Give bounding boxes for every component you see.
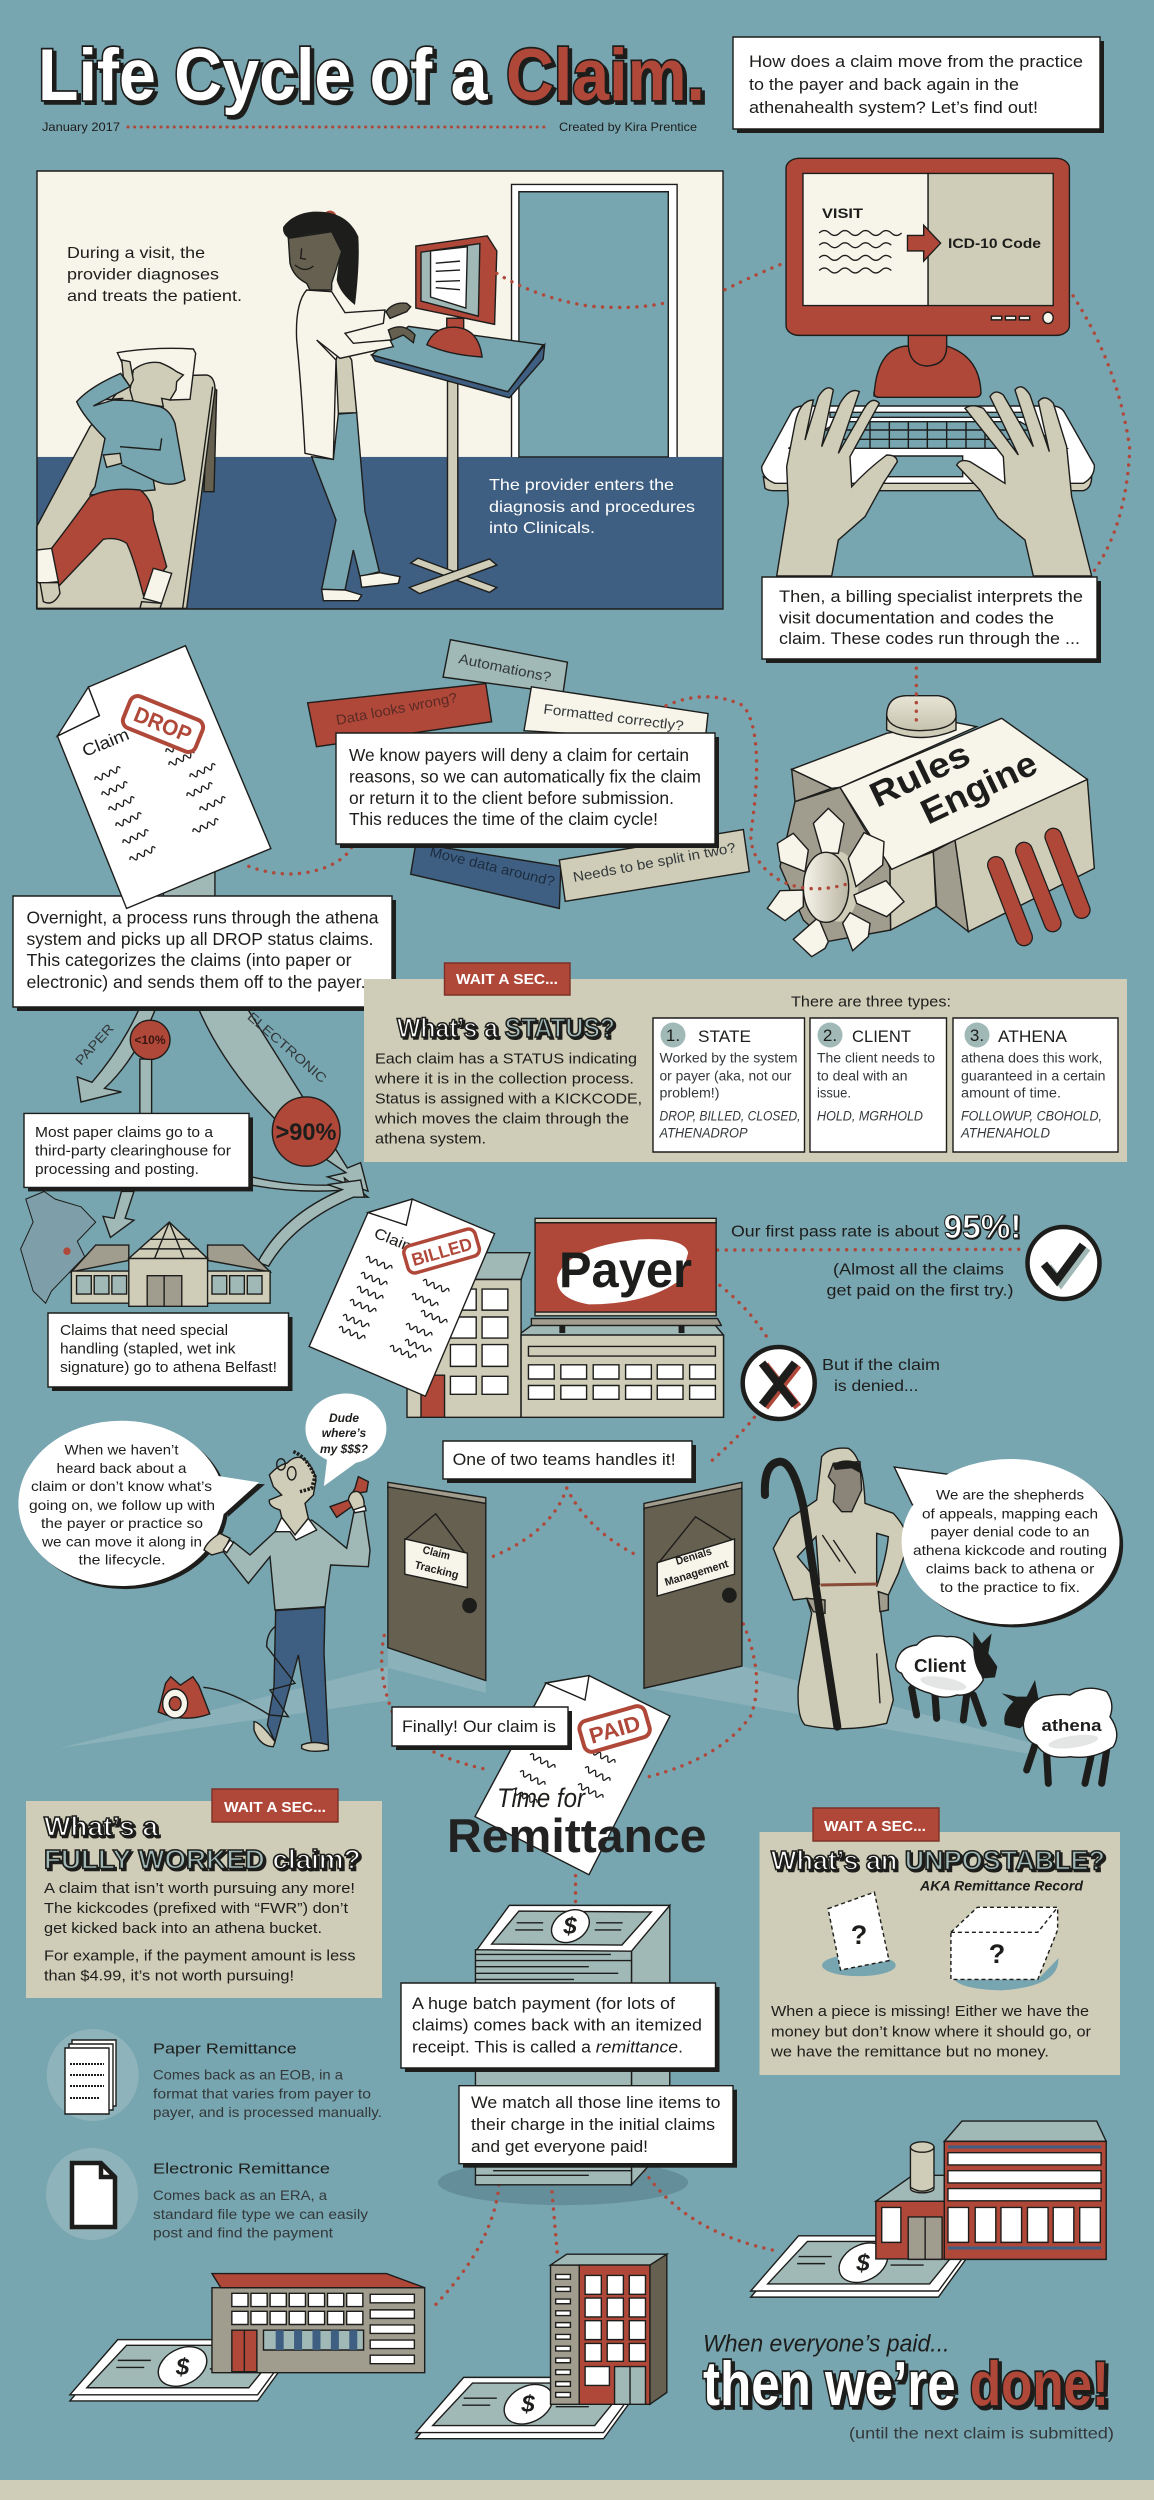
- door: [512, 184, 677, 457]
- panel: fully worked claim: FULLY WORKED claim?: [44, 1844, 361, 1874]
- panel: fully worked claim: get kicked back into an athena bucket.: [44, 1920, 322, 1937]
- icon: check mark: [1028, 1227, 1100, 1299]
- panel: unpostable: AKA Remittance Record: [919, 1879, 1084, 1894]
- batch payment box: A huge batch payment (for lots of: [412, 1995, 675, 2013]
- denied text: is denied...: [834, 1378, 918, 1395]
- status description: Status is assigned with a KICKCODE,: [375, 1090, 642, 1107]
- standing desk with monitor: [372, 236, 545, 594]
- speech bubble: dude where's my money: Dude: [329, 1411, 359, 1425]
- text: during a visit: provider diagnoses: [67, 266, 219, 284]
- speech bubble: follow up: [18, 1421, 265, 1589]
- patient in chair: [37, 348, 217, 608]
- status description: [374, 1050, 642, 1147]
- speech bubble: follow up: we can move it along in: [41, 1534, 202, 1550]
- date and credit line: [42, 120, 697, 134]
- money stack: [475, 1905, 670, 2185]
- batch payment box: [401, 1983, 720, 2072]
- date and credit line: January 2017: [42, 120, 120, 134]
- building with money: left: $: [175, 2354, 190, 2381]
- card: state: or payer (aka, not our: [660, 1068, 792, 1084]
- panel frame: [37, 171, 723, 609]
- electronic remittance item: Electronic Remittance: [153, 2160, 330, 2178]
- panel: unpostable: [760, 1808, 1120, 2075]
- first pass rate callout: get paid on the first try.): [826, 1283, 1014, 1300]
- match line items box: their charge in the initial claims: [471, 2116, 715, 2134]
- panel: fully worked claim: For example, if the payment amount is less: [44, 1948, 356, 1965]
- panel: exam room: [37, 171, 723, 609]
- text: during a visit: During a visit, the: [67, 245, 205, 262]
- illustration: big monitor and keyboard: VISIT: [822, 205, 864, 221]
- automation explanation box: This reduces the time of the claim cycle!: [349, 809, 658, 829]
- illustration: payer building: Payer: [559, 1242, 692, 1298]
- speech bubble: follow up: claim or don’t know what’s: [31, 1478, 212, 1494]
- panel: fully worked claim: A claim that isn’t worth pursuing any more!: [44, 1880, 355, 1897]
- text: provider enters: diagnosis and procedures: [489, 499, 695, 516]
- overnight box: This categorizes the claims (into paper or: [26, 950, 352, 970]
- match line items box: We match all those line items to: [471, 2094, 720, 2112]
- stamp: PAID: [578, 1704, 652, 1754]
- card: state: problem!): [660, 1086, 720, 1101]
- panel: what's a status: What’s a STATUS?: [397, 1013, 615, 1043]
- match line items box: and get everyone paid!: [471, 2138, 648, 2156]
- text: provider enters: [489, 477, 695, 537]
- tag: wait a sec: [813, 1808, 939, 1841]
- speech bubble: follow up: the payer or practice so: [41, 1515, 203, 1531]
- sheep: athena: [1002, 1680, 1117, 1783]
- first pass rate callout: Our first pass rate is about: [731, 1224, 940, 1241]
- illustration: man on phone: [203, 1452, 370, 1751]
- match line items box: [459, 2086, 737, 2168]
- door: claim tracking: [388, 1482, 486, 1681]
- dotted connectors lower: [431, 1876, 776, 2310]
- panel: unpostable: ?: [851, 1920, 867, 1950]
- closing headline: then we’re done!: [703, 2350, 1109, 2419]
- card: client: 2.: [823, 1026, 837, 1045]
- percentage labels: >90%: [276, 1119, 336, 1146]
- building with money: center: $: [520, 2391, 535, 2418]
- tag: wait a sec: [212, 1789, 338, 1822]
- door: denials management: Denials: [674, 1546, 713, 1568]
- building with money: right factory: $: [855, 2250, 870, 2277]
- card: state: Worked by the system: [660, 1051, 798, 1066]
- overnight box: Overnight, a process runs through the athena: [26, 908, 379, 928]
- percentage labels: [72, 1009, 336, 1146]
- title: Life Cycle of a Claim.: [38, 35, 705, 116]
- door: denials management: Management: [663, 1558, 730, 1589]
- document: PAID claim: [475, 1676, 670, 1875]
- athena belfast box: handling (stapled, wet ink: [60, 1340, 236, 1357]
- finally box: Finally! Our claim is: [402, 1718, 556, 1736]
- athena belfast box: [48, 1313, 292, 1391]
- speech bubble: follow up: heard back about a: [56, 1460, 187, 1476]
- card: state: 1.: [666, 1026, 680, 1045]
- footer band: [0, 2480, 1154, 2500]
- dotted connectors: [497, 263, 1130, 577]
- map and athena belfast building: [21, 1191, 270, 1306]
- closing headline: (until the next claim is submitted): [849, 2426, 1114, 2443]
- door: claim tracking: Tracking: [413, 1559, 460, 1582]
- document: BILLED claim: Claim: [372, 1225, 419, 1257]
- card: state: ATHENADROP: [659, 1126, 748, 1141]
- lower question tags: Needs to be split in two?: [572, 839, 737, 885]
- most paper claims box: [24, 1113, 253, 1191]
- card: state: STATE: [698, 1027, 751, 1046]
- most paper claims box: processing and posting.: [35, 1161, 199, 1178]
- card: athena: guaranteed in a certain: [961, 1068, 1106, 1084]
- door: denials management: [644, 1482, 742, 1688]
- automation explanation box: We know payers will deny a claim for certain: [349, 745, 689, 765]
- batch payment box: receipt. This is called a remittance .: [412, 2039, 683, 2057]
- illustration: rules engine: Rules: [864, 734, 976, 815]
- speech bubble: shepherds of appeals: of appeals, mapping each: [922, 1506, 1098, 1522]
- speech bubble: shepherds of appeals: claims back to athena or: [926, 1560, 1095, 1576]
- paper remittance item: format that varies from payer to: [153, 2085, 371, 2101]
- closing headline: [703, 2330, 1114, 2443]
- stamp: BILLED: [402, 1227, 481, 1275]
- left hand: [777, 388, 897, 576]
- door: claim tracking: Claim: [421, 1544, 452, 1563]
- tag: wait a sec: WAIT A SEC...: [224, 1799, 326, 1816]
- billing specialist box: claim. These codes run through the ...: [779, 629, 1080, 648]
- icon: red telephone: [158, 1677, 210, 1718]
- status description: where it is in the collection process.: [374, 1070, 634, 1087]
- floor light wedges: [59, 1648, 1030, 1754]
- percentage labels: ELECTRONIC: [245, 1009, 330, 1086]
- billing specialist box: visit documentation and codes the: [779, 608, 1054, 628]
- icon: denied x: [743, 1347, 815, 1419]
- money stack: $: [562, 1913, 577, 1940]
- denied text: [822, 1357, 940, 1395]
- batch payment box: claims) comes back with an itemized: [412, 2016, 702, 2034]
- denied text: But if the claim: [822, 1357, 940, 1374]
- percentage bubble over 90: [272, 1097, 340, 1166]
- percentage bubble under 10: [130, 1020, 170, 1059]
- heading: time for remittance: [447, 1783, 706, 1862]
- dotted connectors near rules engine: [249, 668, 916, 889]
- arrows to billed and athena belfast: [103, 1176, 368, 1266]
- automation question tags: Automations?: [457, 650, 553, 685]
- building with money: center: [416, 2254, 667, 2439]
- text: provider enters: into Clinicals.: [489, 520, 595, 537]
- heading: time for remittance: Remittance: [447, 1809, 706, 1862]
- intro box: to the payer and back again in the: [749, 75, 1019, 94]
- panel: unpostable: What’s an UNPOSTABLE?: [771, 1846, 1105, 1876]
- electronic remittance item: Comes back as an ERA, a: [153, 2187, 327, 2203]
- speech bubble: dude where's my money: my $$$?: [320, 1442, 369, 1456]
- building with money: left: [70, 2274, 425, 2401]
- illustration: shepherd: [765, 1448, 908, 1729]
- percentage labels: <10%: [134, 1033, 166, 1047]
- text: during a visit: [67, 245, 242, 305]
- first pass rate callout: [731, 1208, 1022, 1300]
- panel: fully worked claim: than $4.99, it’s not worth pursuing!: [44, 1967, 294, 1984]
- athena belfast box: Claims that need special: [60, 1322, 228, 1339]
- one of two teams box: One of two teams handles it!: [453, 1450, 676, 1469]
- automation question tags: Data looks wrong?: [335, 689, 459, 728]
- card: client: issue.: [817, 1086, 851, 1101]
- tag: wait a sec: WAIT A SEC...: [824, 1818, 926, 1835]
- card: client: CLIENT: [852, 1027, 911, 1046]
- status description: Each claim has a STATUS indicating: [375, 1050, 637, 1067]
- automation question tags: [308, 640, 708, 747]
- most paper claims box: third-party clearinghouse for: [35, 1142, 231, 1160]
- document: DROP claim: [57, 646, 271, 908]
- overnight box: electronic) and sends them off to the payer.: [26, 972, 365, 992]
- illustration: rules engine: Engine: [915, 744, 1043, 832]
- speech bubble: dude where's my money: where’s: [322, 1426, 367, 1440]
- speech bubble: shepherds of appeals: athena kickcode and routing: [913, 1542, 1107, 1558]
- illustration: rules engine: [767, 696, 1094, 957]
- intro box: How does a claim move from the practice: [749, 52, 1083, 71]
- speech bubble: shepherds of appeals: We are the shepherds: [936, 1487, 1084, 1503]
- tag: wait a sec: [444, 963, 570, 995]
- stamp: PAID: PAID: [586, 1710, 643, 1749]
- speech bubble: dude where's my money: [305, 1394, 386, 1486]
- one of two teams box: [443, 1441, 696, 1483]
- tag: wait a sec: WAIT A SEC...: [456, 971, 558, 988]
- speech bubble: shepherds of appeals: payer denial code to an: [930, 1524, 1090, 1540]
- closing headline: When everyone’s paid...: [703, 2330, 950, 2357]
- card: client: [810, 1018, 946, 1152]
- intro box: [733, 37, 1104, 133]
- automation question tags: Formatted correctly?: [543, 701, 685, 734]
- automation explanation box: [336, 733, 719, 848]
- text: during a visit: and treats the patient.: [67, 288, 242, 305]
- card: athena: ATHENA: [998, 1027, 1068, 1046]
- right hand: [957, 387, 1092, 576]
- lower question tags: [411, 830, 749, 908]
- speech bubble: follow up: going on, we follow up with: [29, 1497, 215, 1513]
- panel: unpostable: ?: [989, 1939, 1005, 1969]
- automation explanation box: or return it to the client before submission.: [349, 788, 674, 808]
- stamp: DROP: DROP: [130, 702, 195, 747]
- card: state: DROP, BILLED, CLOSED,: [660, 1108, 800, 1124]
- card: athena: ATHENAHOLD: [960, 1126, 1050, 1141]
- intro box: athenahealth system? Let’s find out!: [749, 98, 1038, 117]
- paper remittance item: Comes back as an EOB, in a: [153, 2066, 343, 2082]
- dotted connectors middle: [382, 1249, 1023, 1777]
- speech bubble: shepherds of appeals: to the practice to fix.: [940, 1579, 1080, 1595]
- sheep: client: [896, 1632, 997, 1723]
- panel: unpostable: we have the remittance but no money.: [770, 2043, 1049, 2060]
- card: athena: athena does this work,: [961, 1051, 1102, 1066]
- panel: fully worked claim: What’s a: [44, 1812, 159, 1842]
- overnight box: [13, 896, 396, 1011]
- heading: time for remittance: Time for: [497, 1783, 586, 1813]
- overnight box: system and picks up all DROP status claims.: [26, 929, 374, 949]
- most paper claims box: Most paper claims go to a: [35, 1124, 214, 1141]
- panel: fully worked claim: The kickcodes (prefixed with “FWR”) don’t: [44, 1900, 349, 1917]
- first pass rate callout: (Almost all the claims: [833, 1262, 1004, 1278]
- first pass rate callout: 95%!: [944, 1208, 1022, 1245]
- card: athena: [953, 1018, 1118, 1152]
- stamp: DROP: [120, 694, 206, 754]
- lower question tags: Move data around?: [428, 843, 557, 889]
- building with money: right factory: [751, 2121, 1106, 2297]
- panel: what's a status: [364, 963, 1127, 1162]
- electronic remittance item: post and find the payment: [153, 2225, 333, 2241]
- panel: unpostable: When a piece is missing! Either we have the: [771, 2003, 1089, 2020]
- panel: unpostable: money but don’t know where it should go, or: [771, 2024, 1091, 2041]
- status description: athena system.: [375, 1130, 486, 1147]
- finally box: [392, 1707, 572, 1750]
- sheep: athena: athena: [1042, 1716, 1102, 1735]
- billing specialist box: Then, a billing specialist interprets the: [779, 587, 1083, 606]
- paper remittance item: [47, 2029, 382, 2121]
- percentage labels: PAPER: [72, 1021, 117, 1068]
- status description: which moves the claim through the: [374, 1110, 629, 1127]
- card: client: HOLD, MGRHOLD: [817, 1108, 923, 1124]
- card: athena: amount of time.: [961, 1086, 1061, 1101]
- document: DROP claim: Claim: [79, 725, 132, 761]
- speech bubble: shepherds of appeals: [894, 1459, 1123, 1627]
- paper/electronic arrows: [77, 870, 368, 1191]
- illustration: payer building: [407, 1218, 723, 1417]
- billing specialist box: [762, 577, 1101, 663]
- document: BILLED claim: [309, 1199, 495, 1396]
- stamp: BILLED: BILLED: [409, 1234, 474, 1270]
- electronic remittance item: standard file type we can easily: [153, 2206, 368, 2222]
- speech bubble: follow up: the lifecycle.: [78, 1552, 166, 1568]
- date and credit line: Created by Kira Prentice: [559, 120, 697, 134]
- paper remittance item: payer, and is processed manually.: [153, 2104, 382, 2120]
- panel: fully worked claim: [26, 1789, 382, 1998]
- card: client: to deal with an: [817, 1068, 908, 1084]
- automation explanation box: reasons, so we can automatically fix the claim: [349, 766, 701, 786]
- text: provider enters: The provider enters the: [489, 477, 674, 494]
- sheep: client: Client: [914, 1656, 966, 1676]
- athena belfast box: signature) go to athena Belfast!: [60, 1359, 277, 1376]
- card: client: The client needs to: [817, 1051, 935, 1066]
- doctor: [283, 211, 415, 601]
- card: athena: 3.: [970, 1026, 984, 1045]
- card: state: [653, 1018, 804, 1152]
- electronic remittance item: [46, 2148, 368, 2241]
- illustration: big monitor and keyboard: [762, 158, 1094, 576]
- card: athena: FOLLOWUP, CBOHOLD,: [961, 1108, 1102, 1124]
- paper remittance item: Paper Remittance: [153, 2041, 297, 2058]
- speech bubble: follow up: When we haven’t: [64, 1441, 179, 1457]
- panel: what's a status: There are three types:: [791, 994, 951, 1011]
- illustration: big monitor and keyboard: ICD-10 Code: [948, 235, 1041, 251]
